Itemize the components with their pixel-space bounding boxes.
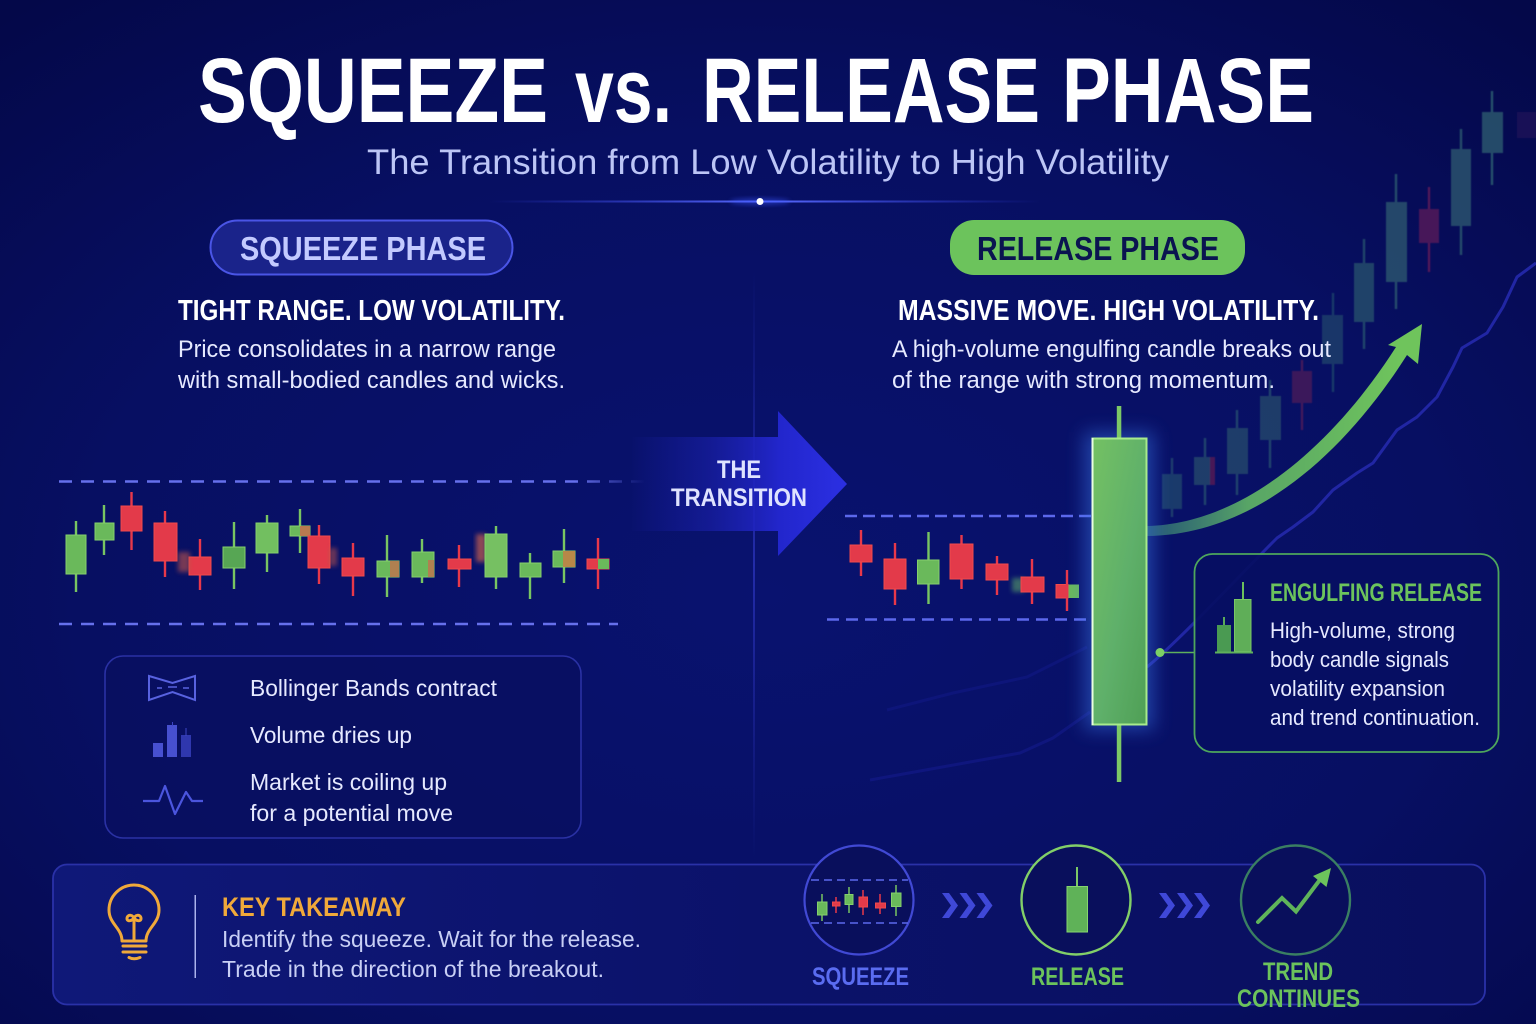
callout body: volatility expansion [1270,676,1445,701]
release description: of the range with strong momentum. [892,367,1275,394]
callout body: High-volume, strong [1270,618,1455,643]
transition arrow: TRANSITION [671,484,807,512]
callout body: and trend continuation. [1270,705,1480,730]
background trend line [870,263,1536,780]
background rising candlesticks [1162,91,1536,517]
transition arrow: THE [717,456,761,484]
key takeaway panel [53,864,1485,1004]
title: RELEASE [702,40,1040,142]
takeaway text [222,926,641,982]
icon: pulse line [143,786,203,814]
chevrons 1 [942,893,992,918]
central vertical divider [753,270,755,860]
squeeze candlestick chart [59,482,645,624]
icon: volume bars [153,722,191,757]
step: release [1022,846,1130,991]
callout body [1270,618,1480,730]
icon: engulfing candles [1215,582,1253,652]
title [198,40,1314,142]
takeaway heading: KEY TAKEAWAY [222,892,406,922]
release description: A high-volume engulfing candle breaks out [892,336,1331,363]
step: squeeze: SQUEEZE [812,963,909,991]
release description [892,336,1331,394]
text: volume: Volume dries up [250,722,412,748]
step: squeeze [804,846,914,991]
release phase badge: RELEASE PHASE [977,230,1219,267]
squeeze description [177,336,565,394]
squeeze phase badge: SQUEEZE PHASE [240,230,486,267]
connector from candle to callout [1156,648,1195,657]
green momentum arrow [1147,324,1422,536]
release range candlesticks [827,516,1092,620]
title: PHASE [1062,40,1314,142]
icon: bollinger bands contracting [149,676,195,700]
squeeze description: with small-bodied candles and wicks. [177,367,565,394]
transition arrow [632,411,847,556]
subtitle: The Transition from Low Volatility to High Volatility [367,143,1170,182]
text: coiling [250,769,453,826]
text: coiling: for a potential move [250,800,453,826]
step: trend continues [1237,846,1360,1013]
chevrons 2 [1159,893,1210,918]
title: vs. [575,40,672,142]
step: release: RELEASE [1031,963,1124,991]
takeaway text: Identify the squeeze. Wait for the release. [222,926,641,952]
text: bollinger bands: Bollinger Bands contract [250,675,497,701]
squeeze heading: TIGHT RANGE. LOW VOLATILITY. [178,295,565,327]
release heading: MASSIVE MOVE. HIGH VOLATILITY. [898,295,1319,327]
title divider with glow dot [490,198,1040,205]
step: trend continues: TREND [1263,958,1333,986]
step: trend continues: CONTINUES [1237,985,1360,1013]
vertical separator [194,895,196,978]
takeaway text: Trade in the direction of the breakout. [222,956,604,982]
callout: engulfing release [1194,554,1498,752]
squeeze description: Price consolidates in a narrow range [178,336,556,363]
engulfing candle [1084,406,1154,782]
squeeze phase badge [210,220,512,274]
squeeze characteristics panel [105,656,581,838]
icon: light bulb [109,885,159,959]
callout body: body candle signals [1270,647,1449,672]
callout heading: ENGULFING RELEASE [1270,579,1482,607]
text: coiling: Market is coiling up [250,769,447,795]
release phase badge [950,220,1245,275]
title: SQUEEZE [198,40,548,142]
